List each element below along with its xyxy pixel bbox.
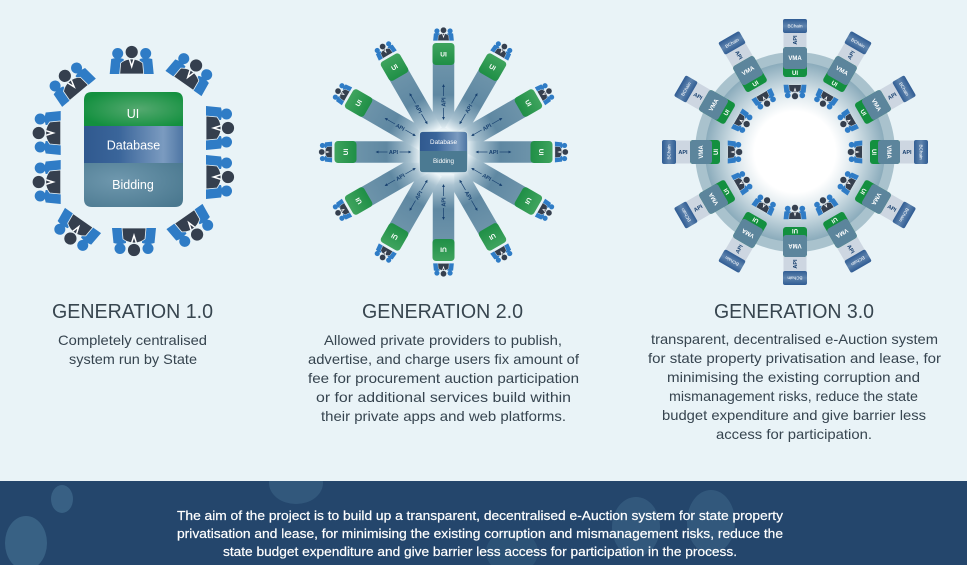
node 270: API [678, 150, 688, 156]
user group: lower right [166, 204, 219, 252]
node 30: API [847, 50, 857, 61]
central server: Database, Bidding: Bidding [433, 158, 454, 165]
spoke 270 [319, 141, 422, 163]
spoke 180: API [442, 197, 448, 207]
spoke 330: UI [390, 63, 400, 72]
node 270: VMA [699, 145, 705, 159]
node 150: BChain [850, 255, 866, 267]
spoke 180 [432, 174, 454, 277]
node 60: VMA [870, 98, 882, 113]
text: generation 1.0 description: Completely centralised [58, 332, 207, 348]
node 180: API [793, 259, 799, 269]
inner ring with white centre [705, 62, 885, 242]
central stack: UI, Database, Bidding [84, 92, 183, 207]
banner bubbles [5, 481, 735, 565]
node 120: BChain [898, 207, 910, 223]
node 300: BChain [680, 81, 692, 97]
node 300: API [692, 92, 703, 102]
node 90 [847, 140, 928, 164]
node 0: VMA [788, 56, 802, 62]
node 300: UI [723, 109, 732, 117]
text: generation 3.0 description: budget expenditure and give barrier less [662, 407, 926, 423]
node 120: API [886, 204, 897, 214]
node 150: API [845, 244, 855, 255]
node 30: VMA [834, 66, 849, 78]
node 180 [783, 204, 807, 285]
node 180: BChain [787, 275, 803, 280]
spoke 120: API [481, 173, 492, 183]
node 210: UI [752, 215, 760, 224]
spoke 270: API [389, 150, 399, 156]
spoke 270: UI [343, 149, 350, 155]
node 150 [811, 191, 872, 273]
node 270 [662, 140, 743, 164]
spoke 300: UI [355, 99, 364, 108]
user group: upper right [165, 48, 218, 96]
text: generation 3.0 description: access for participation. [716, 426, 872, 442]
node 210: VMA [741, 226, 756, 238]
node 90: API [902, 150, 912, 156]
spoke 120: UI [523, 196, 532, 205]
user group: top [110, 46, 154, 74]
user group: upper left [44, 57, 96, 107]
node 90: BChain [918, 144, 923, 160]
central stack: UI, Database, Bidding: UI [127, 107, 139, 121]
node 330: BChain [724, 37, 740, 49]
node 330: VMA [741, 65, 756, 77]
node 330 [718, 31, 779, 113]
node 0 [783, 19, 807, 100]
node 330: API [733, 50, 743, 61]
node 0: API [793, 35, 799, 45]
text: generation 3.0 description: mismanagement risks, reduce the state [669, 388, 918, 404]
banner text: privatisation and lease, for minimising the existing corruption and mismanagement risks, reduce the [177, 526, 783, 541]
text: generation 3.0 description: minimising the existing corruption and [667, 369, 920, 385]
text: generation 2.0 description: their private apps and web platforms. [321, 408, 566, 424]
spoke 330: API [413, 104, 423, 115]
spoke 240 [330, 153, 430, 224]
node 150: UI [830, 215, 838, 224]
user group: lower left [49, 208, 101, 256]
node 300 [674, 75, 756, 136]
text: generation 2.0 description: advertise, and charge users fix amount of [308, 351, 579, 367]
spoke 240: API [395, 173, 407, 183]
spoke 90: UI [537, 149, 544, 155]
node 150: VMA [834, 227, 849, 239]
spoke 120 [457, 153, 557, 224]
spoke 150 [445, 166, 515, 266]
spoke 90 [466, 141, 568, 163]
user group: right upper [206, 106, 234, 150]
spoke 30: UI [488, 63, 497, 73]
node 240: UI [723, 187, 732, 195]
spoke 210: API [414, 190, 424, 201]
spoke 240: UI [355, 196, 364, 205]
spoke 30: API [464, 103, 474, 115]
spoke 300 [330, 80, 430, 151]
node 60 [834, 75, 916, 136]
spoke 60: API [482, 123, 493, 133]
node 180: UI [792, 227, 798, 233]
central server: Database, Bidding [420, 132, 468, 172]
node 210: API [735, 244, 745, 255]
node 60: API [887, 92, 898, 102]
spoke 60 [457, 80, 557, 151]
banner: project aim [0, 481, 967, 565]
node 60: UI [858, 109, 867, 117]
text: generation 2.0 description: fee for procurement auction participation [308, 370, 579, 386]
central server: Database, Bidding: Database [430, 139, 457, 146]
node 300: VMA [709, 98, 721, 113]
node 60: BChain [898, 81, 910, 97]
node 210 [718, 191, 779, 273]
text: generation 3.0 description: for state property privatisation and lease, for [648, 350, 941, 366]
banner text: state budget expenditure and give barrier less access for participation in the process. [223, 544, 737, 559]
heading: generation 1.0: GENERATION 1.0 [52, 301, 213, 323]
text: generation 2.0 description: or for additional services build within [316, 389, 571, 405]
node 90: VMA [885, 145, 891, 159]
banner text [177, 508, 784, 559]
text: generation 2.0 description [308, 332, 579, 424]
node 30: BChain [850, 37, 866, 49]
heading: generation 3.0: GENERATION 3.0 [714, 301, 874, 323]
outer ring [695, 52, 895, 252]
node 90: UI [870, 149, 876, 155]
spoke 90: API [489, 150, 499, 156]
spoke 300: API [394, 123, 406, 133]
central stack: UI, Database, Bidding: Database [107, 138, 160, 152]
node 0: BChain [787, 24, 803, 29]
node 0: UI [792, 71, 798, 77]
heading: generation 2.0: GENERATION 2.0 [362, 301, 523, 323]
node 240: VMA [708, 191, 720, 206]
node 270: BChain [667, 144, 672, 160]
spoke 60: UI [523, 99, 532, 108]
user group: left upper [32, 111, 61, 155]
node 240: API [693, 204, 704, 214]
banner text: The aim of the project is to build up a transparent, decentralised e-Auction system for state property [177, 508, 784, 523]
spoke 0: API [442, 97, 448, 107]
text: generation 3.0 description [648, 331, 941, 442]
user group: right lower [206, 155, 234, 199]
node 330: UI [752, 80, 760, 89]
node 30 [811, 31, 872, 113]
spoke 210: UI [390, 231, 399, 241]
spoke 210 [372, 166, 442, 266]
node 120: VMA [869, 191, 881, 206]
spoke 180: UI [440, 246, 447, 253]
user group: left lower [32, 160, 61, 204]
spoke 150: UI [487, 232, 497, 241]
text: generation 2.0 description: Allowed private providers to publish, [324, 332, 562, 348]
diagram: generation 2.0 [319, 27, 568, 277]
text: generation 1.0 description: system run by State [69, 351, 197, 367]
node 120 [834, 168, 916, 229]
node 30: UI [830, 80, 838, 89]
text: generation 1.0 description [58, 332, 207, 367]
node 180: VMA [788, 242, 802, 248]
node 240 [674, 168, 756, 229]
node 210: BChain [724, 255, 740, 267]
diagram: generation 1.0 [32, 46, 235, 256]
spoke 0: UI [440, 51, 447, 58]
spoke 0 [432, 27, 454, 130]
spoke 30 [445, 38, 515, 138]
node 270: UI [714, 149, 720, 155]
diagram: generation 3.0 [662, 19, 928, 285]
user group: bottom [112, 228, 156, 256]
node 240: BChain [680, 207, 692, 223]
text: generation 3.0 description: transparent, decentralised e-Auction system [651, 331, 938, 347]
central stack: UI, Database, Bidding: Bidding [112, 178, 154, 192]
spoke 150: API [463, 190, 473, 202]
spoke 330 [372, 38, 442, 138]
node 120: UI [858, 187, 867, 195]
